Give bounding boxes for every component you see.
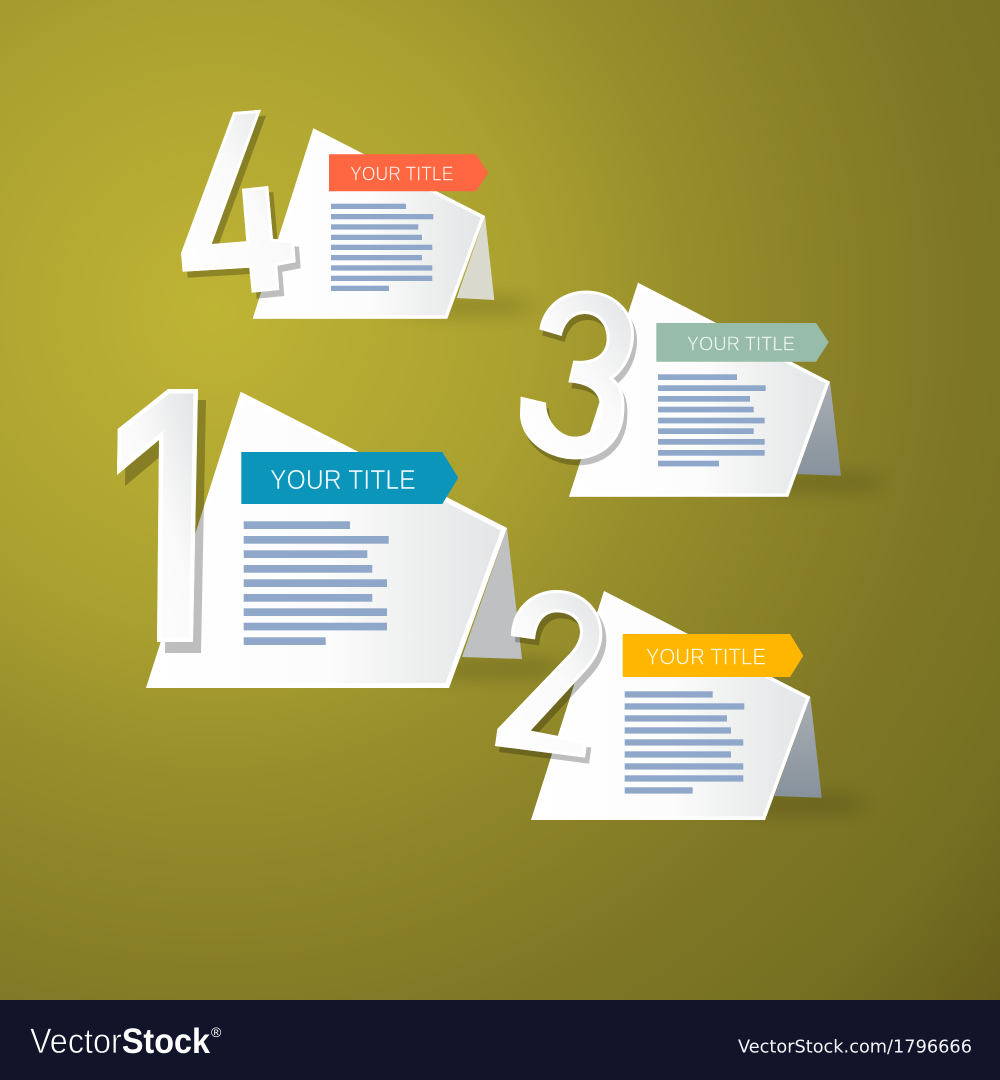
number 2 [495, 590, 602, 758]
text lines [331, 204, 433, 291]
card face [253, 128, 485, 319]
card back flap [457, 216, 494, 300]
card back flap [774, 697, 822, 798]
title ribbon [241, 452, 458, 504]
title ribbon [623, 634, 803, 677]
number 1 [117, 389, 198, 642]
card back flap [462, 528, 522, 659]
text lines [625, 691, 744, 794]
title ribbon: YOUR TITLE [350, 162, 454, 186]
number 4 shadow [186, 116, 301, 299]
title ribbon [329, 154, 488, 191]
footer logo: VectorStock [30, 1022, 210, 1061]
card back flap [797, 382, 841, 476]
panel: step 4 [181, 110, 535, 319]
card face [531, 591, 810, 820]
card shadow [743, 472, 887, 492]
card face [146, 392, 507, 688]
number 3 [520, 291, 634, 459]
title ribbon: YOUR TITLE [270, 464, 416, 495]
card shadow [723, 794, 867, 814]
card shadow [395, 656, 565, 680]
card shadow [395, 296, 535, 316]
panel: step 3 [520, 283, 887, 497]
number 1 shadow [125, 400, 206, 653]
number 2 shadow [499, 596, 606, 764]
registered mark: ® [211, 1024, 222, 1040]
number 4 [181, 110, 296, 293]
title ribbon: YOUR TITLE [646, 644, 766, 670]
panel: step 1 [117, 389, 565, 688]
title ribbon [656, 323, 829, 362]
card face [569, 283, 830, 497]
number 3 shadow [523, 297, 637, 465]
footer bar [0, 1000, 1000, 1080]
text lines [658, 374, 766, 466]
text lines [244, 521, 389, 645]
footer url: VectorStock.com/1796666 [738, 1036, 972, 1058]
panel: step 2 [495, 590, 867, 820]
title ribbon: YOUR TITLE [687, 333, 795, 355]
